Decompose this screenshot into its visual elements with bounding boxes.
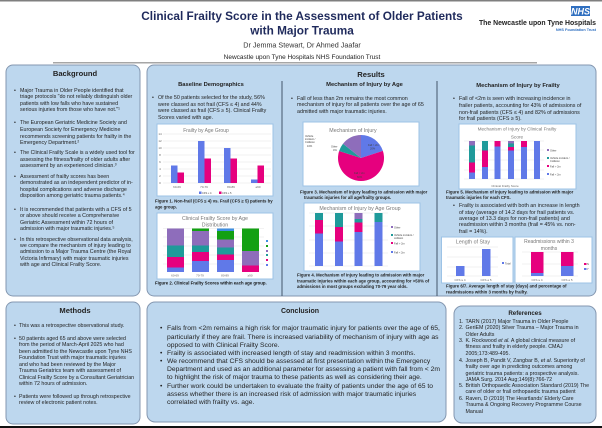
caption: figure 5: [446, 190, 574, 200]
chart: clinical frailty score by age distribution: 60-69: [171, 274, 179, 278]
methods bullets: Trauma Geriatrics team with assessment of: [19, 368, 121, 374]
chart: frailty by age group: 12: [158, 139, 162, 143]
conclusion bullets: [160, 325, 440, 406]
background bullets: triage protocols "do not reliably distinguish older: [20, 94, 133, 100]
chart: mechanism of injury pie: Fall < 2m: [354, 171, 365, 175]
chart: readmissions within 3 months: [515, 237, 592, 283]
text: mechanism by age: •: [291, 96, 293, 102]
conclusion bullets: Department and used as an additional parameter for assessing a patient with fall from < 2m: [167, 366, 440, 373]
background bullets: Victoria Infirmary) with major traumatic injuries: [20, 256, 129, 262]
chart: mechanism of injury by clinical frailty score: Vehicle incident /: [550, 156, 570, 160]
chart: readmissions within 3 months: Y: [587, 267, 589, 271]
reference list: 3.: [459, 338, 463, 344]
panel: background: Background: [53, 69, 98, 78]
reference list: frailty over age in predicting outcomes among: [466, 364, 572, 370]
chart: clinical frailty score by age distribution: Distribution: [202, 222, 228, 228]
chart: mechanism of injury by clinical frailty score: Fall > 2m: [550, 164, 561, 168]
methods bullets: from the period of March-April 2025 who had: [19, 342, 124, 348]
chart: length of stay: Length of Stay: [456, 240, 490, 246]
background bullets: •: [14, 174, 16, 180]
conclusion bullets: We recommend that CFS should be assessed at first presentation within the Emergency: [167, 358, 431, 365]
logo: NHS trust: [479, 6, 597, 32]
title: [141, 9, 463, 38]
caption: figure 1: Figure 1. Non-frail (CFS ≤ 4) vs. Frail (CFS ≥ 5) patients by: [155, 198, 273, 204]
methods bullets: Foundation Trust with major traumatic injuries: [19, 355, 126, 361]
methods bullets: [14, 323, 134, 406]
panel: background: [6, 65, 140, 296]
heading: mechanism by frailty: Mechanism of Injury by Frailty: [476, 83, 560, 89]
text: mechanism by age: admitted with major traumatic injuries.: [297, 109, 387, 115]
text: length of stay and readmission: [453, 203, 580, 235]
text: mechanism by frailty: for frail patients (CFS ≥ 5).: [459, 116, 522, 122]
chart: readmissions within 3 months: CFS ≥ 5: [562, 278, 573, 282]
caption: figure 6/7: Figure 6/7. Average length of stay (days) and percentage of: [446, 284, 567, 288]
chart: clinical frailty score by age distribution: ≥90: [248, 274, 253, 278]
conclusion bullets: assess whether there is an increased risk of admission with major traumatic injuries: [167, 391, 417, 398]
reference list: 2005;173:489-495.: [466, 351, 510, 357]
text: baseline: Scores varied with age.: [158, 115, 213, 121]
background bullets: hospital complications and adverse discharge: [20, 187, 127, 193]
background bullets: recommends screening patients for frailty in the: [20, 134, 131, 140]
logo: NHS trust: NHS Foundation Trust: [556, 28, 597, 32]
background bullets: disposition among geriatric trauma patients.⁴: [20, 193, 125, 199]
text: mechanism by frailty: Fall of <2m is seen with increasing incidence in: [459, 96, 571, 102]
methods bullets: •: [14, 394, 16, 400]
background bullets: •: [14, 120, 16, 126]
chart: mechanism of injury pie: Mechanism of Injury: [329, 128, 377, 134]
panel: references: [454, 306, 596, 423]
background bullets: •: [14, 237, 16, 243]
panel: conclusion: Conclusion: [281, 308, 319, 315]
chart: length of stay: [442, 237, 513, 283]
chart: frailty by age group: CFS ≤ 4: [202, 191, 212, 195]
text: baseline: [152, 95, 267, 121]
methods bullets: 50 patients aged 65 and above were selected: [19, 336, 126, 342]
chart: mechanism of injury pie: Other: [331, 144, 338, 148]
reference list: 6.: [459, 396, 463, 402]
chart: frailty by age group: ≥90: [256, 185, 261, 189]
caption: figure 3: [300, 190, 428, 200]
panel: results: [147, 65, 596, 296]
text: baseline: Of the 50 patients selected for the study, 56%: [158, 95, 265, 101]
chart: mechanism of injury by age group: Fall > 2m: [394, 242, 405, 246]
conclusion bullets: Frailty is associated with increased length of stay and readmission within 3 months.: [167, 350, 415, 357]
reference list: K. Rockwood et al. A global clinical measure of: [466, 338, 576, 344]
reference list: JAMA Surg. 2014 Aug;149(8):766-72: [466, 377, 552, 383]
reference list: [459, 319, 589, 415]
reference list: GeriEM (2020) Silver Trauma – Major Trauma in: [466, 325, 579, 331]
text: mechanism by age: [291, 96, 424, 115]
chart: mechanism of injury by clinical frailty score: Score: [511, 134, 524, 140]
conclusion bullets: •: [160, 383, 163, 390]
chart: frailty by age group: 4: [159, 167, 161, 171]
text: length of stay and readmission: •: [453, 203, 455, 209]
conclusion bullets: •: [160, 350, 163, 357]
text: mechanism by age: Fall of less than 2m remains the most common: [297, 96, 408, 102]
chart: mechanism of injury by age group: Other: [394, 226, 401, 230]
background bullets: •: [14, 88, 16, 94]
reference list: 5.: [459, 383, 463, 389]
heading: baseline demographics: Baseline Demographics: [178, 82, 244, 88]
chart: frailty by age group: Frailty by Age Group: [183, 128, 229, 134]
background bullets: Emergency Department.²: [20, 140, 79, 146]
methods bullets: Clinical Frailty Score by a Consultant Geriatrician: [19, 375, 134, 381]
chart: mechanism of injury pie: Vehicle: [305, 134, 314, 138]
reference list: Manual: [466, 409, 483, 415]
chart: frailty by age group: CFS ≥ 5: [222, 191, 232, 195]
text: mechanism by frailty: non-frail patients (CFS ≤ 4) and 82% of admissions: [459, 110, 580, 116]
background bullets: •: [14, 150, 16, 156]
chart: mechanism of injury by clinical frailty score: Collision: [550, 159, 560, 163]
background bullets: In this retrospective observational data analysis,: [20, 237, 133, 243]
caption: figure 2: Figure 2. Clinical Frailty Scores within each age group.: [155, 280, 267, 286]
chart: readmissions within 3 months: Readmissions within 3: [524, 239, 574, 245]
reference list: 1.: [459, 319, 463, 325]
caption: figure 1: age group.: [155, 204, 177, 210]
background bullets: serious injuries from those who have not."¹: [20, 107, 120, 113]
background bullets: •: [14, 207, 16, 213]
caption: figure 3: traumatic injuries for all age/frailty groups.: [304, 195, 391, 200]
reference list: fitness and frailty in elderly people. CMAJ: [466, 344, 563, 350]
reference list: British Orthopaedic Association Standard (2019) The: [466, 383, 589, 389]
chart: mechanism of injury by age group: Mechanism of Injury by Age Group: [319, 206, 401, 212]
chart: readmissions within 3 months: CFS ≤ 4: [532, 278, 543, 282]
chart: mechanism of injury by age group: Vehicle incident /: [394, 233, 414, 237]
chart: mechanism of injury pie: 4%: [333, 148, 337, 152]
text: baseline: were classed as frail (CFS ≥ 5). Clinical Frailty: [158, 108, 267, 114]
text: length of stay and readmission: frail = 14%).: [459, 229, 488, 235]
conclusion bullets: to highlight the risk of major trauma to these patients as well as considering their age.: [167, 374, 422, 381]
conclusion bullets: •: [160, 358, 163, 365]
caption: figure 3: Figure 3. Mechanism of injury leading to admission with major: [300, 190, 428, 194]
chart: frailty by age group: 6: [159, 160, 161, 164]
conclusion bullets: opposed to with Clinical Frailty Score.: [167, 342, 280, 349]
conclusion bullets: •: [160, 325, 163, 332]
conclusion bullets: particularly if they are frail. There is increased variability of mechanism of injury with age as: [167, 334, 439, 341]
panel: methods: Methods: [59, 306, 91, 315]
methods bullets: •: [14, 336, 16, 342]
caption: figure 6/7: [446, 284, 567, 294]
chart: mechanism of injury by clinical frailty score: [459, 124, 576, 189]
reference list: geriatric trauma patients: a prospective analysis.: [466, 371, 579, 377]
chart: clinical frailty score by age distribution: Clinical Frailty Score by Age: [182, 216, 248, 222]
chart: length of stay: Total: [505, 262, 511, 266]
caption: figure 4: traumatic injuries within each age group, accounting for >50% of: [297, 278, 430, 284]
methods bullets: review of electronic patient notes.: [19, 400, 98, 406]
background bullets: admission to a Major Trauma Centre (the Royal: [20, 249, 131, 255]
chart: mechanism of injury by clinical frailty score: Clinical Frailty Score: [491, 184, 519, 188]
conclusion bullets: Further work could be undertaken to evaluate the frailty of patients under the age of 65 to: [167, 383, 433, 390]
panel: methods: [6, 302, 140, 424]
conclusion bullets: correlated with frailty vs. age.: [167, 399, 255, 406]
chart: frailty by age group: 2: [159, 174, 161, 178]
panel: references: References: [508, 310, 542, 317]
caption: figure 6/7: readmissions within 3 months by frailty.: [446, 290, 528, 294]
text: mechanism by frailty: frailer patients, accounting for 43% of admissions of: [459, 103, 582, 109]
chart: mechanism of injury pie: incident /: [305, 137, 316, 141]
chart: readmissions within 3 months: months: [541, 246, 558, 252]
chart: mechanism of injury by age group: collision: [394, 236, 404, 240]
chart: length of stay: CFS ≥ 5: [481, 278, 492, 282]
reference list: 2.: [459, 325, 463, 331]
chart: clinical frailty score by age distribution: [157, 213, 273, 279]
background bullets: admission with major traumatic injuries.⁵: [20, 226, 115, 232]
chart: mechanism of injury by clinical frailty score: Fall < 2m: [550, 172, 561, 176]
panel: conclusion: [147, 302, 446, 422]
chart: mechanism of injury by clinical frailty score: Mechanism of Injury by Clinical Frailty: [478, 126, 557, 132]
text: length of stay and readmission: readmission within 3 months (frail = 45% vs. non-: [459, 222, 576, 228]
background bullets: Geriatric Assessment within 72 hours of: [20, 220, 114, 226]
heading: mechanism by age: Mechanism of Injury by Age: [326, 82, 404, 88]
chart: frailty by age group: [157, 124, 273, 196]
reference list: Older Adults: [466, 332, 495, 338]
chart: mechanism of injury by age group: Fall < 2m: [394, 250, 405, 254]
methods bullets: and who had been reviewed by the Major: [19, 362, 116, 368]
reference list: TARN (2017) Major Trauma in Older People: [466, 319, 568, 325]
text: mechanism by age: mechanism of injury for all patients over the age of 65: [297, 102, 424, 108]
methods bullets: •: [14, 323, 16, 329]
chart: mechanism of injury by age group: [304, 203, 420, 271]
background bullets: It is recommended that patients with a CFS of 5: [20, 207, 132, 213]
chart: readmissions within 3 months: N: [587, 262, 589, 266]
chart: mechanism of injury pie: [303, 122, 419, 186]
chart: mechanism of injury pie: Fall > 2m: [368, 143, 379, 147]
chart: frailty by age group: 70-79: [200, 185, 208, 189]
background bullets: The European Geriatric Medicine Society and: [20, 120, 127, 126]
text: mechanism by frailty: •: [453, 96, 455, 102]
chart: frailty by age group: 14: [158, 132, 162, 136]
background bullets: Major Trauma in Older People identified that: [20, 88, 124, 94]
panel: results: Results: [357, 70, 385, 79]
title: Clinical Frailty Score in the Assessment of Older Patients: [141, 9, 463, 23]
text: length of stay and readmission: Frailty is associated with both an increase in length: [459, 203, 580, 209]
chart: mechanism of injury pie: 60%: [357, 175, 363, 179]
chart: length of stay: CFS ≤ 4: [455, 278, 466, 282]
background bullets: or above should receive a Comprehensive: [20, 213, 119, 219]
background bullets: with age and Clinical Frailty Score.: [20, 262, 101, 268]
methods bullets: Patients were followed up through retrospective: [19, 394, 131, 400]
chart: clinical frailty score by age distribution: 70-79: [196, 274, 204, 278]
reference list: 4.: [459, 358, 463, 364]
text: baseline: were classed as not frail (CFS ≤ 4) and 44%: [158, 102, 262, 108]
chart: mechanism of injury pie: 16%: [307, 144, 313, 148]
background bullets: European Society for Emergency Medicine: [20, 127, 120, 133]
title: with Major Trauma: [249, 24, 354, 38]
logo: NHS trust: The Newcastle upon Tyne Hospitals: [479, 20, 596, 27]
conclusion bullets: Falls from <2m remains a high risk for major traumatic injury for patients over the age of 65,: [167, 325, 440, 332]
chart: clinical frailty score by age distribution: 80-89: [221, 274, 229, 278]
caption: figure 5: Figure 5. Mechanism of injury leading to admission with major: [446, 190, 574, 194]
background bullets: The Clinical Frailty Scale is a widely used tool for: [20, 150, 135, 156]
background bullets: assessing the fitness/frailty of older adults after: [20, 157, 130, 163]
chart: mechanism of injury pie: 20%: [370, 146, 376, 150]
methods bullets: been admitted to the Newcastle upon Tyne NHS: [19, 349, 132, 355]
text: baseline: •: [152, 95, 154, 101]
chart: frailty by age group: 60-69: [173, 185, 181, 189]
chart: mechanism of injury pie: Collision: [305, 140, 315, 144]
chart: frailty by age group: 10: [158, 146, 162, 150]
background bullets: Assessment of frailty scores has been: [20, 174, 109, 180]
text: mechanism by frailty: [453, 96, 582, 122]
background bullets: patients with low falls who have sustained: [20, 101, 118, 107]
reference list: Trauma & Ongoing Recovery Programme Course: [466, 402, 582, 408]
caption: figure 1: [155, 198, 273, 210]
background bullets: assessment by an experienced clinician.³: [20, 163, 117, 169]
logo: NHS trust: NHS: [571, 6, 590, 16]
methods bullets: within 72 hours of admission.: [19, 381, 87, 387]
caption: figure 4: admissions in most groups excluding 70-79 year olds.: [297, 284, 408, 289]
background bullets: demonstrated as an independent predictor of in-: [20, 180, 133, 186]
chart: frailty by age group: 80-89: [227, 185, 235, 189]
background bullets: [14, 88, 135, 268]
text: length of stay and readmission: of stay (average of 14.2 days for frail patients vs.: [459, 210, 574, 216]
reference list: Raven, D (2019) The Heartlands' Elderly Care: [466, 396, 574, 402]
background bullets: we compare the mechanism of injury leading to: [20, 243, 131, 249]
reference list: care of older or frail orthopaedic trauma patient: [466, 389, 576, 395]
chart: frailty by age group: 8: [159, 153, 161, 157]
caption: figure 4: [297, 272, 430, 289]
text: length of stay and readmission: average of 13.3 days for non-frail patients) and: [459, 216, 570, 222]
chart: mechanism of injury by clinical frailty score: Other: [550, 148, 557, 152]
caption: figure 5: traumatic injuries for each CFS.: [446, 195, 511, 200]
chart: frailty by age group: 0: [159, 181, 161, 185]
methods bullets: This was a retrospective observational study.: [19, 323, 124, 329]
caption: figure 4: Figure 4. Mechanism of injury leading to admission with major: [297, 272, 425, 278]
affiliation: Newcastle upon Tyne Hospitals NHS Foundation Trust: [224, 54, 381, 61]
authors: Dr Jemma Stewart, Dr Ahmed Jaafar: [243, 40, 361, 50]
reference list: Joseph B, Pandit V, Zangbar B, et al. Superiority of: [466, 358, 585, 364]
